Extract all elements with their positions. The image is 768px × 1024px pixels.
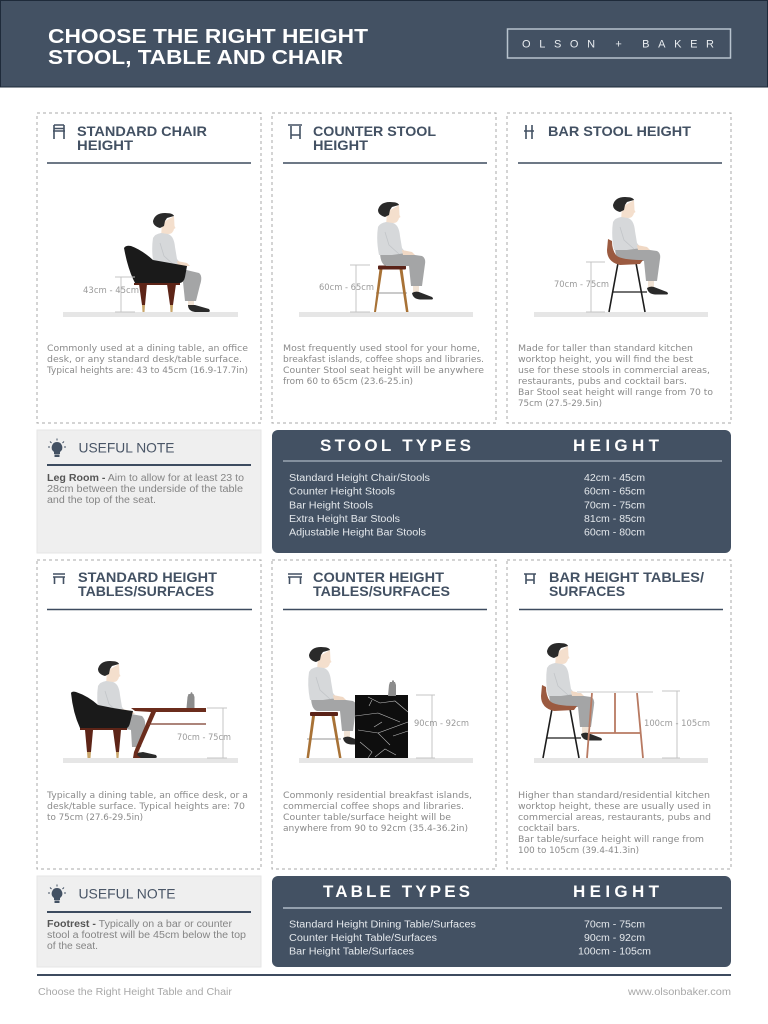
panel: bar stool height [507, 113, 731, 423]
heading: standard chair: STANDARD CHAIR [77, 123, 207, 139]
text: chair description: desk, or any standard desk/table surface. [47, 354, 242, 365]
illustration: person on chair [63, 213, 238, 317]
table header: HEIGHT [573, 882, 660, 901]
panel: standard height tables [37, 560, 261, 869]
table header: HEIGHT [573, 436, 660, 455]
heading: counter height tables: COUNTER HEIGHT [313, 569, 444, 585]
table rows: 60cm - 80cm [584, 528, 645, 538]
illustration: person on counter stool [299, 202, 473, 317]
icon: bar table [524, 574, 536, 584]
panel: standard chair height [37, 113, 261, 423]
marble counter [355, 695, 408, 758]
heading: standard height tables: STANDARD HEIGHT [78, 569, 217, 585]
heading: counter stool: HEIGHT [313, 137, 368, 153]
illustration: person at dining table [63, 661, 238, 763]
table header [323, 882, 660, 901]
heading: standard height tables: TABLES/SURFACES [78, 583, 214, 599]
table rows: Extra Height Bar Stools [289, 514, 400, 525]
heading: bar height tables: BAR HEIGHT TABLES/ [549, 569, 704, 585]
table rows: 100cm - 105cm [578, 946, 651, 958]
heading: bar height tables: SURFACES [549, 583, 625, 599]
text: chair description: Commonly used at a dining table, an office [47, 343, 248, 354]
dimension: 60cm - 65cm [319, 265, 374, 312]
footer: Choose the Right Height Table and Chair [38, 987, 233, 998]
icon: light bulb [48, 438, 66, 457]
table rows: 60cm - 65cm [584, 486, 645, 498]
text: leg room note: 28cm between the underside of the table [47, 484, 243, 495]
icon: counter stool [288, 125, 302, 139]
table rows: 81cm - 85cm [584, 514, 645, 525]
text: counter stool description: Counter Stool seat height will be anywhere [283, 365, 484, 376]
text: bar table description: Higher than standard/residential kitchen [518, 790, 710, 801]
heading: useful note: USEFUL NOTE [78, 886, 176, 902]
table header: TABLE TYPES [323, 882, 470, 901]
text: bar stool description: worktop height, you will find the best [518, 354, 693, 365]
text: footrest note: Footrest - Typically on a bar or counter [47, 919, 224, 930]
dimension: 43cm - 45cm: 43cm - 45cm [83, 286, 139, 296]
icon: standard table [53, 574, 65, 584]
dimension: 70cm - 75cm: 70cm - 75cm [554, 280, 609, 290]
illustration: person on bar stool [534, 197, 708, 317]
heading: useful note: USEFUL NOTE [78, 440, 174, 456]
icon: counter table [288, 574, 302, 584]
text: bar table description: Bar table/surface height will range from [518, 834, 704, 845]
text: bar table description: cocktail bars. [518, 823, 580, 834]
panel: useful note, leg room [37, 430, 261, 553]
panel: useful note, footrest [37, 876, 261, 967]
dimension: 70cm - 75cm [554, 262, 609, 312]
dimension: 60cm - 65cm: 60cm - 65cm [319, 283, 374, 293]
text: leg room note: and the top of the seat. [47, 495, 156, 506]
heading: counter height tables: TABLES/SURFACES [313, 583, 450, 599]
title: STOOL, TABLE AND CHAIR [48, 46, 343, 69]
table rows: 90cm - 92cm [584, 933, 645, 944]
table rows: Counter Height Table/Surfaces [289, 933, 437, 944]
illustration: person at counter [299, 647, 473, 763]
icon: light bulb [48, 884, 66, 903]
title [48, 25, 369, 69]
table rows: Counter Height Stools [289, 486, 395, 498]
illustration: person at bar table [534, 643, 708, 763]
text: counter stool description: from 60 to 65cm (23.6-25.in) [283, 376, 413, 387]
dimension: 70cm - 75cm: 70cm - 75cm [177, 733, 231, 743]
text: footrest note: stool a footrest will be 45cm below the top [47, 930, 246, 941]
heading: counter stool: COUNTER STOOL [313, 123, 436, 139]
header band [0, 0, 768, 87]
table rows: 70cm - 75cm [584, 920, 645, 930]
text: standard table description: Typically a dining table, an office desk, or a [46, 790, 248, 801]
text: chair description: Typical heights are: 43 to 45cm (16.9-17.7in) [46, 365, 248, 376]
title: CHOOSE THE RIGHT HEIGHT [48, 25, 369, 48]
dimension: 90cm - 92cm [414, 695, 469, 758]
text: counter table description: commercial coffee shops and libraries. [283, 801, 464, 812]
text: counter stool description: breakfast islands, coffee shops and libraries. [283, 354, 484, 365]
icon: bar stool [524, 125, 534, 139]
text: bar stool description: Made for taller than standard kitchen [518, 343, 693, 354]
text: bar table description: worktop height, these are usually used in [518, 801, 711, 812]
dimension: 100cm - 105cm: 100cm - 105cm [644, 719, 710, 729]
table rows: Standard Height Dining Table/Surfaces [289, 920, 476, 930]
table rows: Bar Height Stools [289, 500, 373, 512]
footer [38, 987, 731, 998]
table: table types [272, 876, 731, 967]
dimension: 100cm - 105cm [644, 691, 710, 758]
logo: Olson + Baker [508, 29, 730, 58]
panel: counter stool height [272, 113, 496, 423]
panel: bar height tables [507, 560, 731, 869]
text: counter table description: anywhere from 90 to 92cm (35.4-36.2in) [283, 823, 468, 834]
text: bar stool description: 75cm (27.5-29.5in) [518, 398, 602, 409]
panel: counter height tables [272, 560, 496, 869]
text: leg room note: Leg Room - Aim to allow for at least 23 to [47, 473, 236, 484]
text: counter table description: Commonly residential breakfast islands, [283, 790, 472, 801]
text: counter stool description: Most frequently used stool for your home, [283, 343, 480, 354]
table rows: Standard Height Chair/Stools [289, 473, 430, 484]
logo: Olson + Baker: OLSON + BAKER [522, 38, 714, 50]
heading: bar stool: BAR STOOL HEIGHT [548, 123, 691, 139]
text: bar stool description: use for these stools in commercial areas, [518, 365, 710, 376]
dimension: 70cm - 75cm [177, 708, 231, 758]
table rows: 70cm - 75cm [584, 500, 645, 512]
heading: standard chair: HEIGHT [77, 137, 133, 153]
text: counter table description: Counter table/surface height will be [283, 812, 451, 823]
table rows: Adjustable Height Bar Stools [289, 528, 426, 538]
dimension: 90cm - 92cm: 90cm - 92cm [414, 719, 469, 729]
text: standard table description: to 75cm (27.6-29.5in) [47, 812, 143, 823]
table header: STOOL TYPES [320, 436, 471, 455]
table rows: Bar Height Table/Surfaces [289, 946, 414, 958]
text: footrest note: of the seat. [47, 941, 98, 952]
text: bar stool description: restaurants, pubs and cocktail bars. [518, 376, 687, 387]
dimension: 43cm - 45cm [83, 277, 139, 312]
footer: www.olsonbaker.com [627, 987, 731, 998]
text: bar table description: 100 to 105cm (39.4-41.3in) [518, 845, 639, 856]
text: bar table description: commercial areas, restaurants, pubs and [518, 812, 711, 823]
table header [320, 436, 660, 455]
text: bar stool description: Bar Stool seat height will range from 70 to [518, 387, 713, 398]
table: stool types [272, 430, 731, 553]
table rows: 42cm - 45cm [584, 473, 645, 484]
icon: chair [53, 125, 65, 139]
text: standard table description: desk/table surface. Typical heights are: 70 [47, 801, 245, 812]
